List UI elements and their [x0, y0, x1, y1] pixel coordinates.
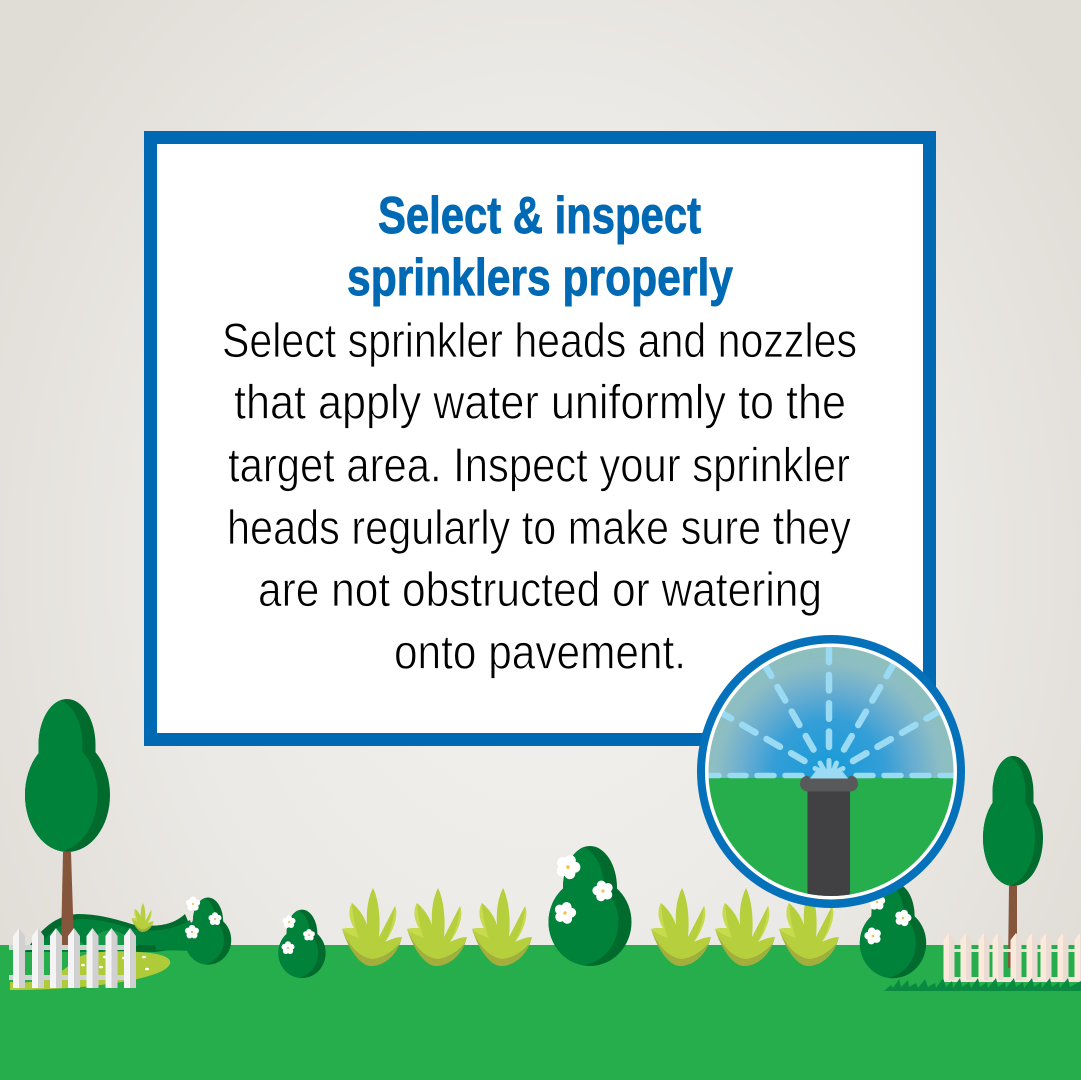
- grass plants: right group: [651, 888, 839, 966]
- body text: heads regularly to make sure they: [227, 502, 851, 555]
- ground: [0, 945, 1081, 1080]
- flowering bush: right: [849, 882, 926, 978]
- grass plants: left group: [342, 888, 532, 966]
- flowering bush: left: [177, 897, 231, 965]
- flowering bush: small: [271, 910, 326, 978]
- body text: [222, 315, 857, 680]
- heading: [347, 187, 733, 307]
- body text: onto pavement.: [394, 626, 686, 680]
- peach picket fence: [944, 933, 1081, 982]
- body text: are not obstructed or watering: [258, 564, 822, 617]
- central spray fan: [810, 760, 848, 778]
- lawn in lens: [708, 778, 954, 896]
- sprinkler cap: [800, 776, 858, 792]
- body text: target area. Inspect your sprinkler: [228, 440, 850, 492]
- body text: that apply water uniformly to the: [234, 376, 846, 430]
- small grass plant on hedge: [132, 903, 154, 932]
- left garden hedge: [25, 914, 200, 952]
- tree: left: [25, 699, 110, 945]
- flowering bush: large centre: [536, 846, 632, 966]
- sprinkler illustration in circular lens: [697, 635, 965, 908]
- heading: sprinklers properly: [347, 249, 733, 307]
- white picket fence: [9, 928, 136, 988]
- tree: right: [983, 756, 1043, 968]
- panel: white card with blue border: [150, 138, 930, 740]
- light green garden patch: [10, 951, 170, 990]
- horizontal spray: [700, 773, 962, 778]
- heading: Select & inspect: [378, 187, 701, 245]
- sky with water gradient: [708, 647, 954, 778]
- water spray rays: [721, 647, 940, 764]
- sprinkler post: [808, 792, 850, 896]
- grass tuft under peach fence: [884, 978, 1081, 991]
- body text: Select sprinkler heads and nozzles: [222, 315, 857, 368]
